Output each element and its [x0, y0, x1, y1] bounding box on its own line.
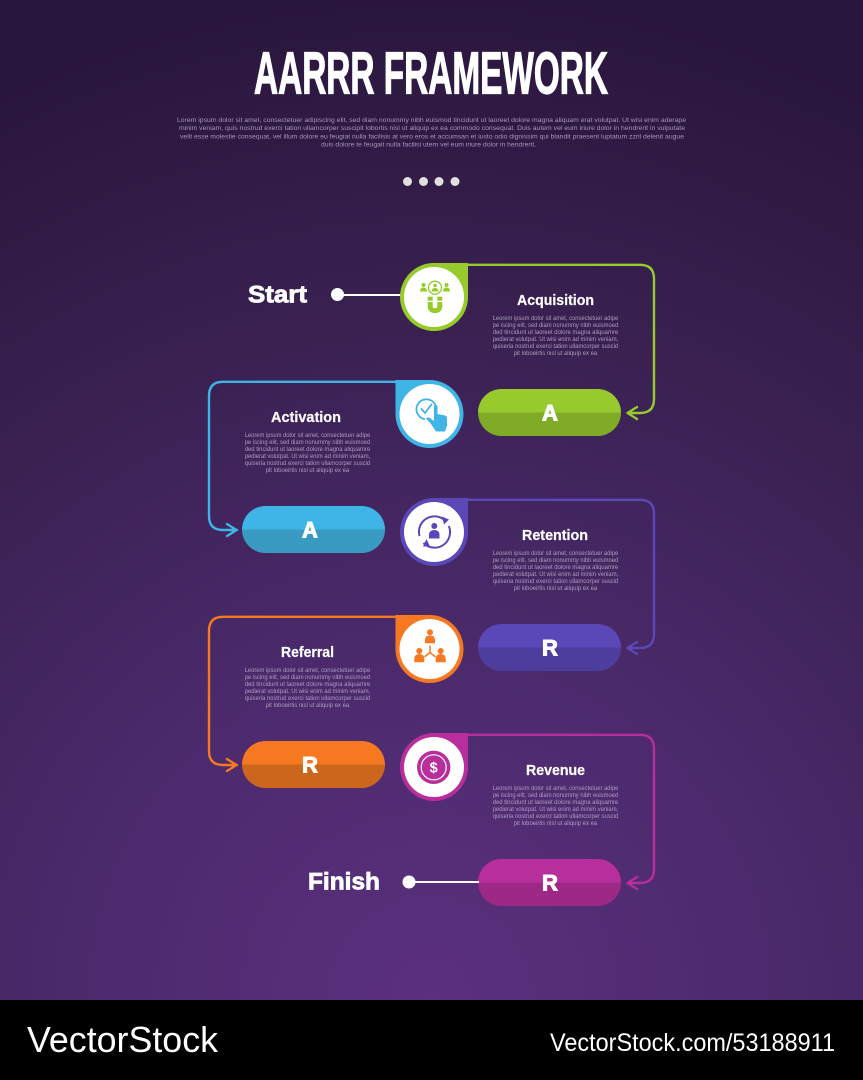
pill: retention R [478, 624, 621, 671]
text: acquisition description: ded tincidunt ut laoreet dolore magna aliquamre [493, 330, 619, 336]
arrow: retention connector [466, 500, 654, 654]
text: retention description: quiseria nostrud exerci tation ullamcorper suscid [493, 579, 618, 585]
finish marker: Finish [308, 868, 380, 896]
text: retention description: pedierat volutpat. Ut wisi enim ad minim veniam, [493, 572, 619, 578]
text: retention description: ded tincidunt ut laoreet dolore magna aliquamre [493, 565, 619, 571]
heading: retention: Retention [522, 528, 588, 544]
text: acquisition description: Leorem ipsum dolor sit amet, consectetuer adipe [493, 316, 619, 322]
text: activation description [245, 433, 371, 474]
footer logo: VectorStock [27, 1019, 219, 1060]
text: referral description: Leorem ipsum dolor sit amet, consectetuer adipe [245, 668, 371, 674]
text: referral description: pedierat volutpat. Ut wisi enim ad minim veniam, [245, 689, 371, 695]
text: referral description: pit loboeirtis nisl ut aliquip ex ea [266, 703, 350, 709]
heading: acquisition: Acquisition [517, 293, 594, 309]
text: revenue description: quiseria nostrud exerci tation ullamcorper suscid [493, 814, 618, 820]
pill: revenue R: R [542, 870, 558, 896]
heading: revenue: Revenue [526, 763, 585, 779]
pill: retention R: R [542, 636, 558, 660]
text: acquisition description: pit loboeirtis nisl ut aliquip ex ea [514, 351, 598, 357]
text: revenue description [493, 786, 619, 827]
text: activation description: Leorem ipsum dolor sit amet, consectetuer adipe [245, 433, 371, 439]
text: revenue description: pedierat volutpat. Ut wisi enim ad minim veniam, [493, 807, 619, 813]
text: activation description: pe iscing elit, sed diam nonummy nibh euismoed [245, 440, 370, 446]
text: referral description: pe iscing elit, sed diam nonummy nibh euismoed [245, 675, 370, 681]
start marker: Start [248, 282, 307, 308]
intro text: duis dolore te feugait nulla facilisi utem vel eum iriure dolor in hendrerit. [321, 142, 536, 148]
intro text: Lorem ipsum dolor sit amet, consectetuer adipiscing elit, sed diam nonummy nibh euismod tincidunt ut laoreet dolore magna aliquam erat volutpat. Ut wisi enim aderape [177, 117, 686, 124]
pill: referral R: R [302, 752, 318, 778]
panel: referral [209, 615, 464, 788]
text: referral description: quiseria nostrud exerci tation ullamcorper suscid [245, 696, 370, 702]
footer bar [0, 1000, 863, 1080]
text: retention description: Leorem ipsum dolor sit amet, consectetuer adipe [493, 551, 619, 557]
panel: retention [400, 498, 654, 671]
pill: acquisition A [478, 389, 621, 436]
start marker [248, 282, 402, 308]
text: activation description: pedierat volutpat. Ut wisi enim ad minim veniam, [245, 454, 371, 460]
text: referral description [245, 668, 371, 709]
icon: retention cycle [400, 498, 468, 566]
text: retention description: pit loboeirtis nisl ut aliquip ex ea [514, 586, 598, 592]
footer url: VectorStock.com/53188911 [550, 1029, 835, 1057]
text: referral description: ded tincidunt ut laoreet dolore magna aliquamre [245, 682, 371, 688]
text: revenue description: ded tincidunt ut laoreet dolore magna aliquamre [493, 800, 619, 806]
panel: acquisition [400, 263, 654, 436]
arrow: acquisition connector [466, 265, 654, 419]
arrow: activation connector [209, 382, 398, 536]
text: acquisition description: pedierat volutpat. Ut wisi enim ad minim veniam, [493, 337, 619, 343]
pill: acquisition A: A [542, 400, 558, 426]
pill: referral R [242, 741, 385, 788]
text: revenue description: pit loboeirtis nisl ut aliquip ex ea [514, 821, 598, 827]
arrow: referral connector [209, 617, 398, 771]
pill: revenue R [478, 859, 621, 906]
text: activation description: pit loboeirtis nisl ut aliquip ex ea [266, 468, 350, 474]
pill: activation A: A [302, 518, 318, 542]
text: revenue description: pe iscing elit, sed diam nonummy nibh euismoed [493, 793, 618, 799]
text: acquisition description: pe iscing elit, sed diam nonummy nibh euismoed [493, 323, 618, 329]
icon: referral network [396, 615, 464, 683]
icon: revenue coin [400, 733, 468, 801]
text: acquisition description [493, 316, 619, 357]
heading: referral: Referral [281, 645, 334, 661]
title: AARRR FRAMEWORK [254, 40, 608, 106]
intro text: velit esse molestie consequat, vel illum dolore eu feugiat nulla facilisis at vero eros et accumsan et iusto odio dignissim qui blandit praesent luptatum zzril delenit augue [180, 134, 684, 140]
intro text: minim veniam, quis nostrud exerci tation ullamcorper suscipit lobortis nisl ut aliquip ex ea commodo consequat. Duis autem vel eum iriure dolor in hendrerit in vulputate [179, 125, 685, 132]
text: retention description [493, 551, 619, 592]
finish marker [308, 868, 479, 896]
pill: activation A [242, 506, 385, 553]
pagination dots [403, 177, 460, 186]
text: revenue description: Leorem ipsum dolor sit amet, consectetuer adipe [493, 786, 619, 792]
panel: activation [209, 380, 464, 553]
heading: activation: Activation [271, 410, 341, 426]
icon: activation check hand [396, 380, 464, 448]
text: retention description: pe iscing elit, sed diam nonummy nibh euismoed [493, 558, 618, 564]
text: acquisition description: quiseria nostrud exerci tation ullamcorper suscid [493, 344, 618, 350]
icon: revenue coin: $ [430, 760, 438, 776]
panel: revenue [400, 733, 654, 906]
icon: acquisition magnet [400, 263, 468, 331]
intro text [177, 117, 686, 148]
text: activation description: quiseria nostrud exerci tation ullamcorper suscid [245, 461, 370, 467]
arrow: revenue connector [466, 735, 654, 889]
text: activation description: ded tincidunt ut laoreet dolore magna aliquamre [245, 447, 371, 453]
